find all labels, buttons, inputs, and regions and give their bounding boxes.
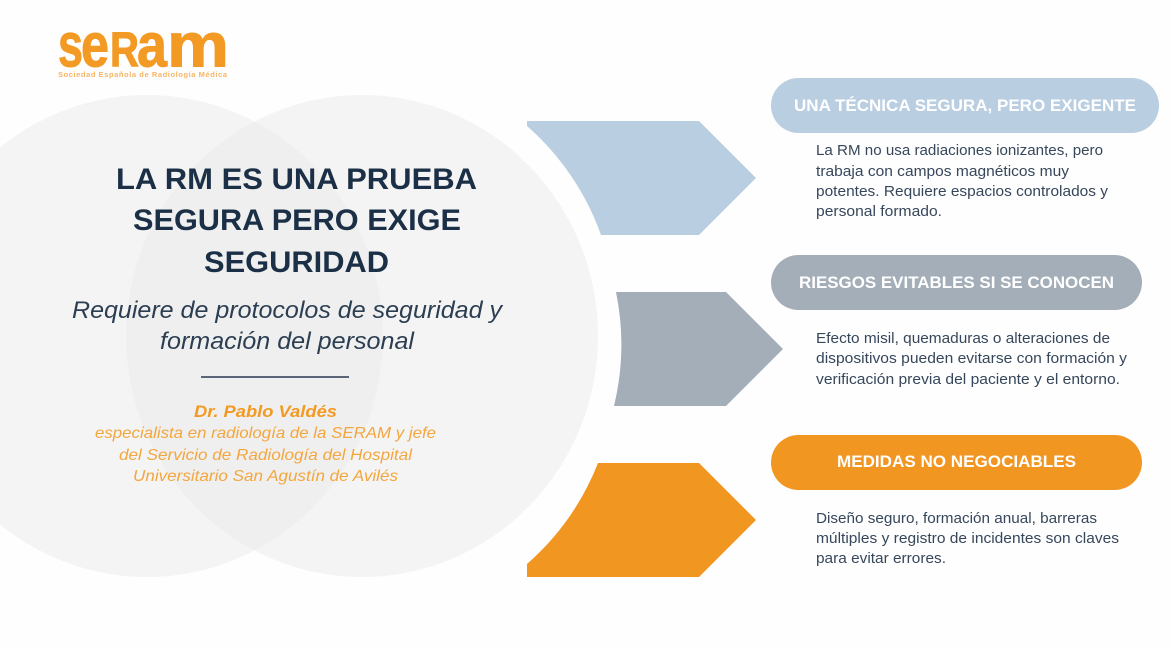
arrow: orange	[527, 463, 756, 577]
text block: riesgos evitables	[816, 331, 1128, 388]
divider	[201, 376, 349, 378]
pill: una técnica segura: UNA TÉCNICA SEGURA, PERO EXIGENTE	[794, 96, 1136, 115]
text block: medidas no negociables: Diseño seguro, formación anual, barreras	[816, 511, 1097, 527]
text block: medidas no negociables: para evitar errores.	[816, 551, 946, 567]
author credit: Universitario San Agustín de Avilés	[133, 468, 398, 485]
logo: SERAM: R	[110, 24, 139, 78]
title: SEGURIDAD	[204, 246, 389, 279]
pill: riesgos evitables	[771, 255, 1142, 310]
logo: SERAM: m	[167, 12, 229, 80]
subtitle: formación del personal	[160, 328, 415, 355]
text block: riesgos evitables: verificación previa del paciente y el entorno.	[816, 372, 1120, 388]
text block: una técnica segura: personal formado.	[816, 204, 942, 220]
text block: riesgos evitables: Efecto misil, quemaduras o alteraciones de	[816, 331, 1110, 347]
title: SEGURA PERO EXIGE	[133, 204, 461, 237]
arrow: gray	[614, 292, 783, 406]
text block: una técnica segura: La RM no usa radiaciones ionizantes, pero	[816, 143, 1103, 159]
logo: SERAM	[58, 12, 229, 80]
logo: SERAM: s	[58, 12, 83, 80]
text block: una técnica segura: potentes. Requiere espacios controlados y	[816, 184, 1109, 200]
text block: medidas no negociables	[816, 511, 1119, 567]
logo: SERAM: a	[137, 12, 167, 80]
pill: medidas no negociables: MEDIDAS NO NEGOCIABLES	[837, 453, 1076, 471]
title: LA RM ES UNA PRUEBA	[116, 163, 477, 196]
title	[116, 163, 477, 279]
pill: medidas no negociables	[771, 435, 1142, 490]
author credit: del Servicio de Radiología del Hospital	[119, 447, 412, 464]
text block: una técnica segura	[816, 143, 1109, 220]
text block: riesgos evitables: dispositivos pueden evitarse con formación y	[816, 351, 1128, 367]
text block: una técnica segura: trabaja con campos magnéticos muy	[816, 164, 1070, 180]
background overlapping circles	[0, 95, 598, 577]
author credit: especialista en radiología de la SERAM y jefe	[95, 425, 436, 442]
logo: SERAM: Sociedad Española de Radiología Médica	[58, 70, 228, 79]
text block: medidas no negociables: múltiples y registro de incidentes son claves	[816, 531, 1119, 547]
author credit: Dr. Pablo Valdés	[194, 403, 337, 421]
pill: una técnica segura	[771, 78, 1159, 133]
subtitle	[72, 297, 504, 355]
subtitle: Requiere de protocolos de seguridad y	[72, 297, 504, 324]
author credit	[95, 403, 436, 485]
logo: SERAM: e	[81, 12, 109, 80]
arrow: blue	[527, 121, 756, 235]
pill: riesgos evitables: RIESGOS EVITABLES SI SE CONOCEN	[799, 274, 1114, 292]
